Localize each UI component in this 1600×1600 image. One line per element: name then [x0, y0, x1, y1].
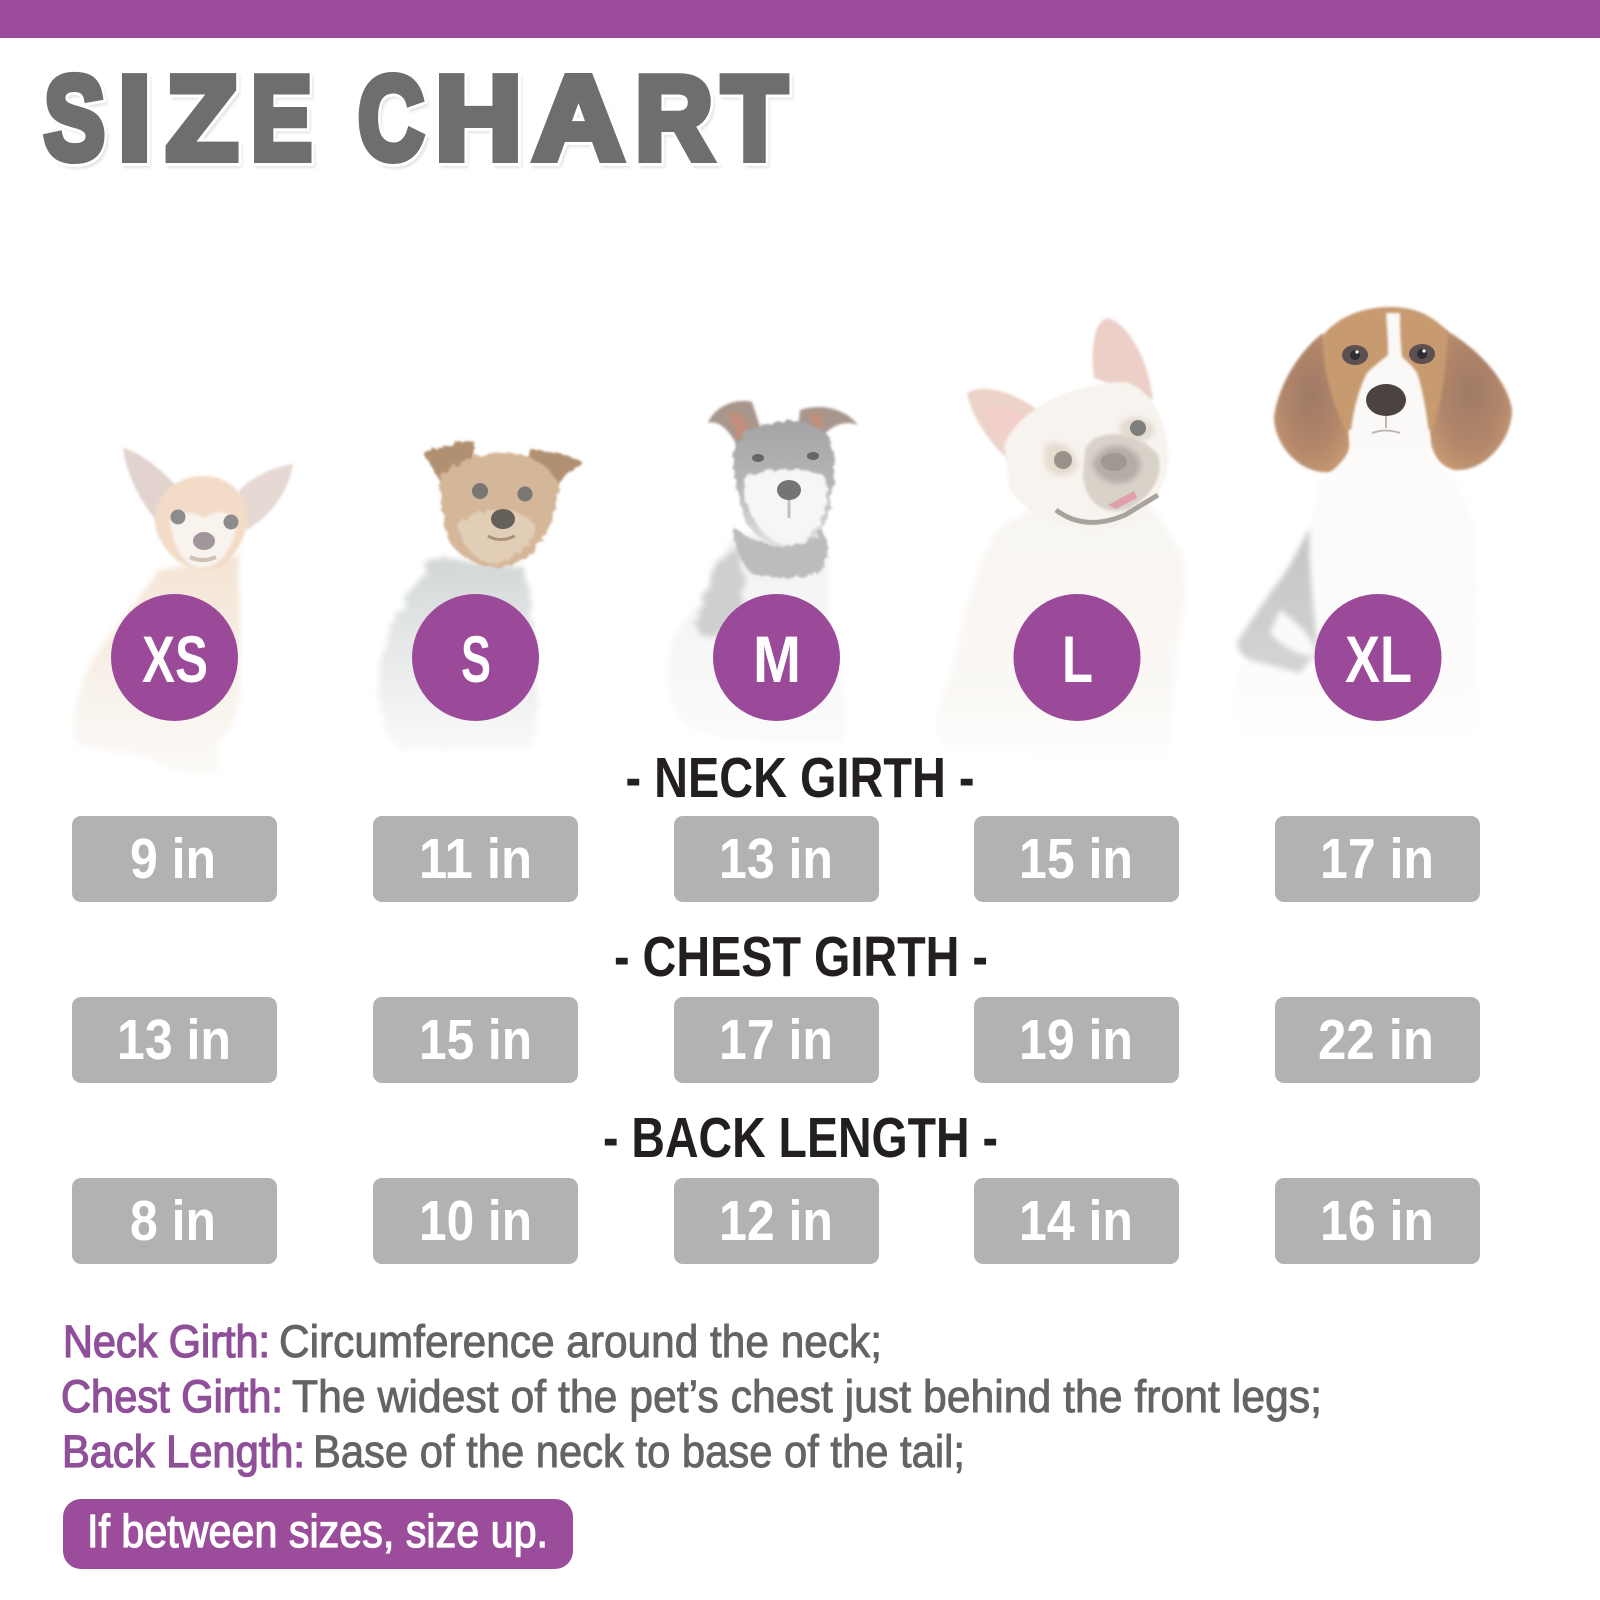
- dog photo: yorkie (S): [379, 441, 583, 750]
- title: T: [722, 52, 787, 185]
- chihuahua face features: [170, 510, 238, 560]
- size badge: M: [713, 594, 840, 721]
- title: C: [358, 52, 424, 185]
- row: neck girth values: 15 in: [1019, 827, 1133, 891]
- row: back length values: 10 in: [419, 1189, 532, 1253]
- definitions text block: Circumference around the neck;: [279, 1316, 882, 1367]
- definitions text block: Base of the neck to base of the tail;: [313, 1426, 965, 1477]
- size badge: L: L: [1062, 622, 1093, 696]
- title: Z: [166, 52, 238, 185]
- size badge: L: [1014, 594, 1140, 721]
- title: S: [44, 52, 105, 185]
- row: chest girth values: 22 in: [1318, 1008, 1434, 1072]
- title: E: [254, 56, 315, 189]
- size badge: XL: [1314, 594, 1442, 721]
- heading: neck girth: - NECK GIRTH -: [626, 746, 974, 810]
- row: neck girth values: 9 in: [130, 827, 216, 891]
- row: chest girth values: 13 in: [117, 1008, 231, 1072]
- title: H: [435, 52, 522, 185]
- title: E: [251, 52, 312, 185]
- title: S: [44, 52, 105, 185]
- row: neck girth values: 17 in: [1320, 827, 1434, 891]
- french bulldog face features: [1054, 420, 1158, 522]
- schnauzer face features: [752, 452, 819, 518]
- top purple bar: [0, 0, 1600, 38]
- size badge: S: [412, 594, 539, 721]
- title: T: [725, 56, 790, 189]
- title: A: [533, 52, 624, 185]
- heading: chest girth: - CHEST GIRTH -: [614, 925, 988, 989]
- callout: size up tip: If between sizes, size up.: [87, 1505, 548, 1557]
- title: S: [47, 56, 108, 189]
- title: Z: [169, 56, 241, 189]
- dog photo: beagle (XL): [1233, 307, 1512, 760]
- row: chest girth values: 17 in: [719, 1008, 833, 1072]
- title: A: [533, 52, 624, 185]
- size badge: XL: XL: [1345, 622, 1412, 696]
- size badge: XS: XS: [142, 622, 208, 696]
- title: I: [121, 56, 154, 189]
- title: R: [635, 52, 713, 185]
- row: chest girth values: [72, 997, 1480, 1083]
- size badge: M: M: [753, 622, 801, 696]
- row: neck girth values: [72, 816, 1480, 902]
- heading: back length: - BACK LENGTH -: [603, 1106, 998, 1170]
- row: back length values: 14 in: [1019, 1189, 1133, 1253]
- title: R: [638, 56, 716, 189]
- size badge: XS: [111, 594, 238, 721]
- row: neck girth values: 13 in: [719, 827, 833, 891]
- dog photo: schnauzer (M): [668, 401, 858, 743]
- row: back length values: [72, 1178, 1480, 1264]
- title: T: [722, 52, 787, 185]
- title: R: [635, 52, 713, 185]
- title: H: [435, 52, 522, 185]
- definitions text block: Chest Girth:: [61, 1371, 283, 1422]
- row: neck girth values: 11 in: [419, 827, 532, 891]
- title: [44, 52, 790, 189]
- row: back length values: 8 in: [130, 1189, 216, 1253]
- title: Z: [166, 52, 238, 185]
- title: I: [118, 52, 151, 185]
- row: chest girth values: 19 in: [1019, 1008, 1133, 1072]
- size badge: S: S: [461, 622, 491, 696]
- definitions text block: Neck Girth:: [63, 1316, 270, 1367]
- title: C: [358, 52, 424, 185]
- title: E: [251, 52, 312, 185]
- row: back length values: 12 in: [719, 1189, 833, 1253]
- definitions text block: Back Length:: [62, 1426, 305, 1477]
- callout: size up tip: [63, 1499, 573, 1569]
- title: A: [536, 56, 627, 189]
- beagle face features: [1342, 344, 1435, 433]
- definitions text block: The widest of the pet’s chest just behind the front legs;: [292, 1371, 1322, 1422]
- row: chest girth values: 15 in: [419, 1008, 532, 1072]
- yorkie face features: [472, 483, 532, 540]
- title: I: [118, 52, 151, 185]
- title: C: [361, 56, 427, 189]
- definitions text block: [61, 1316, 1322, 1477]
- dog photo: french bulldog (L): [936, 318, 1186, 763]
- dog photo: chihuahua (XS): [74, 448, 293, 774]
- row: back length values: 16 in: [1320, 1189, 1434, 1253]
- title: H: [438, 56, 525, 189]
